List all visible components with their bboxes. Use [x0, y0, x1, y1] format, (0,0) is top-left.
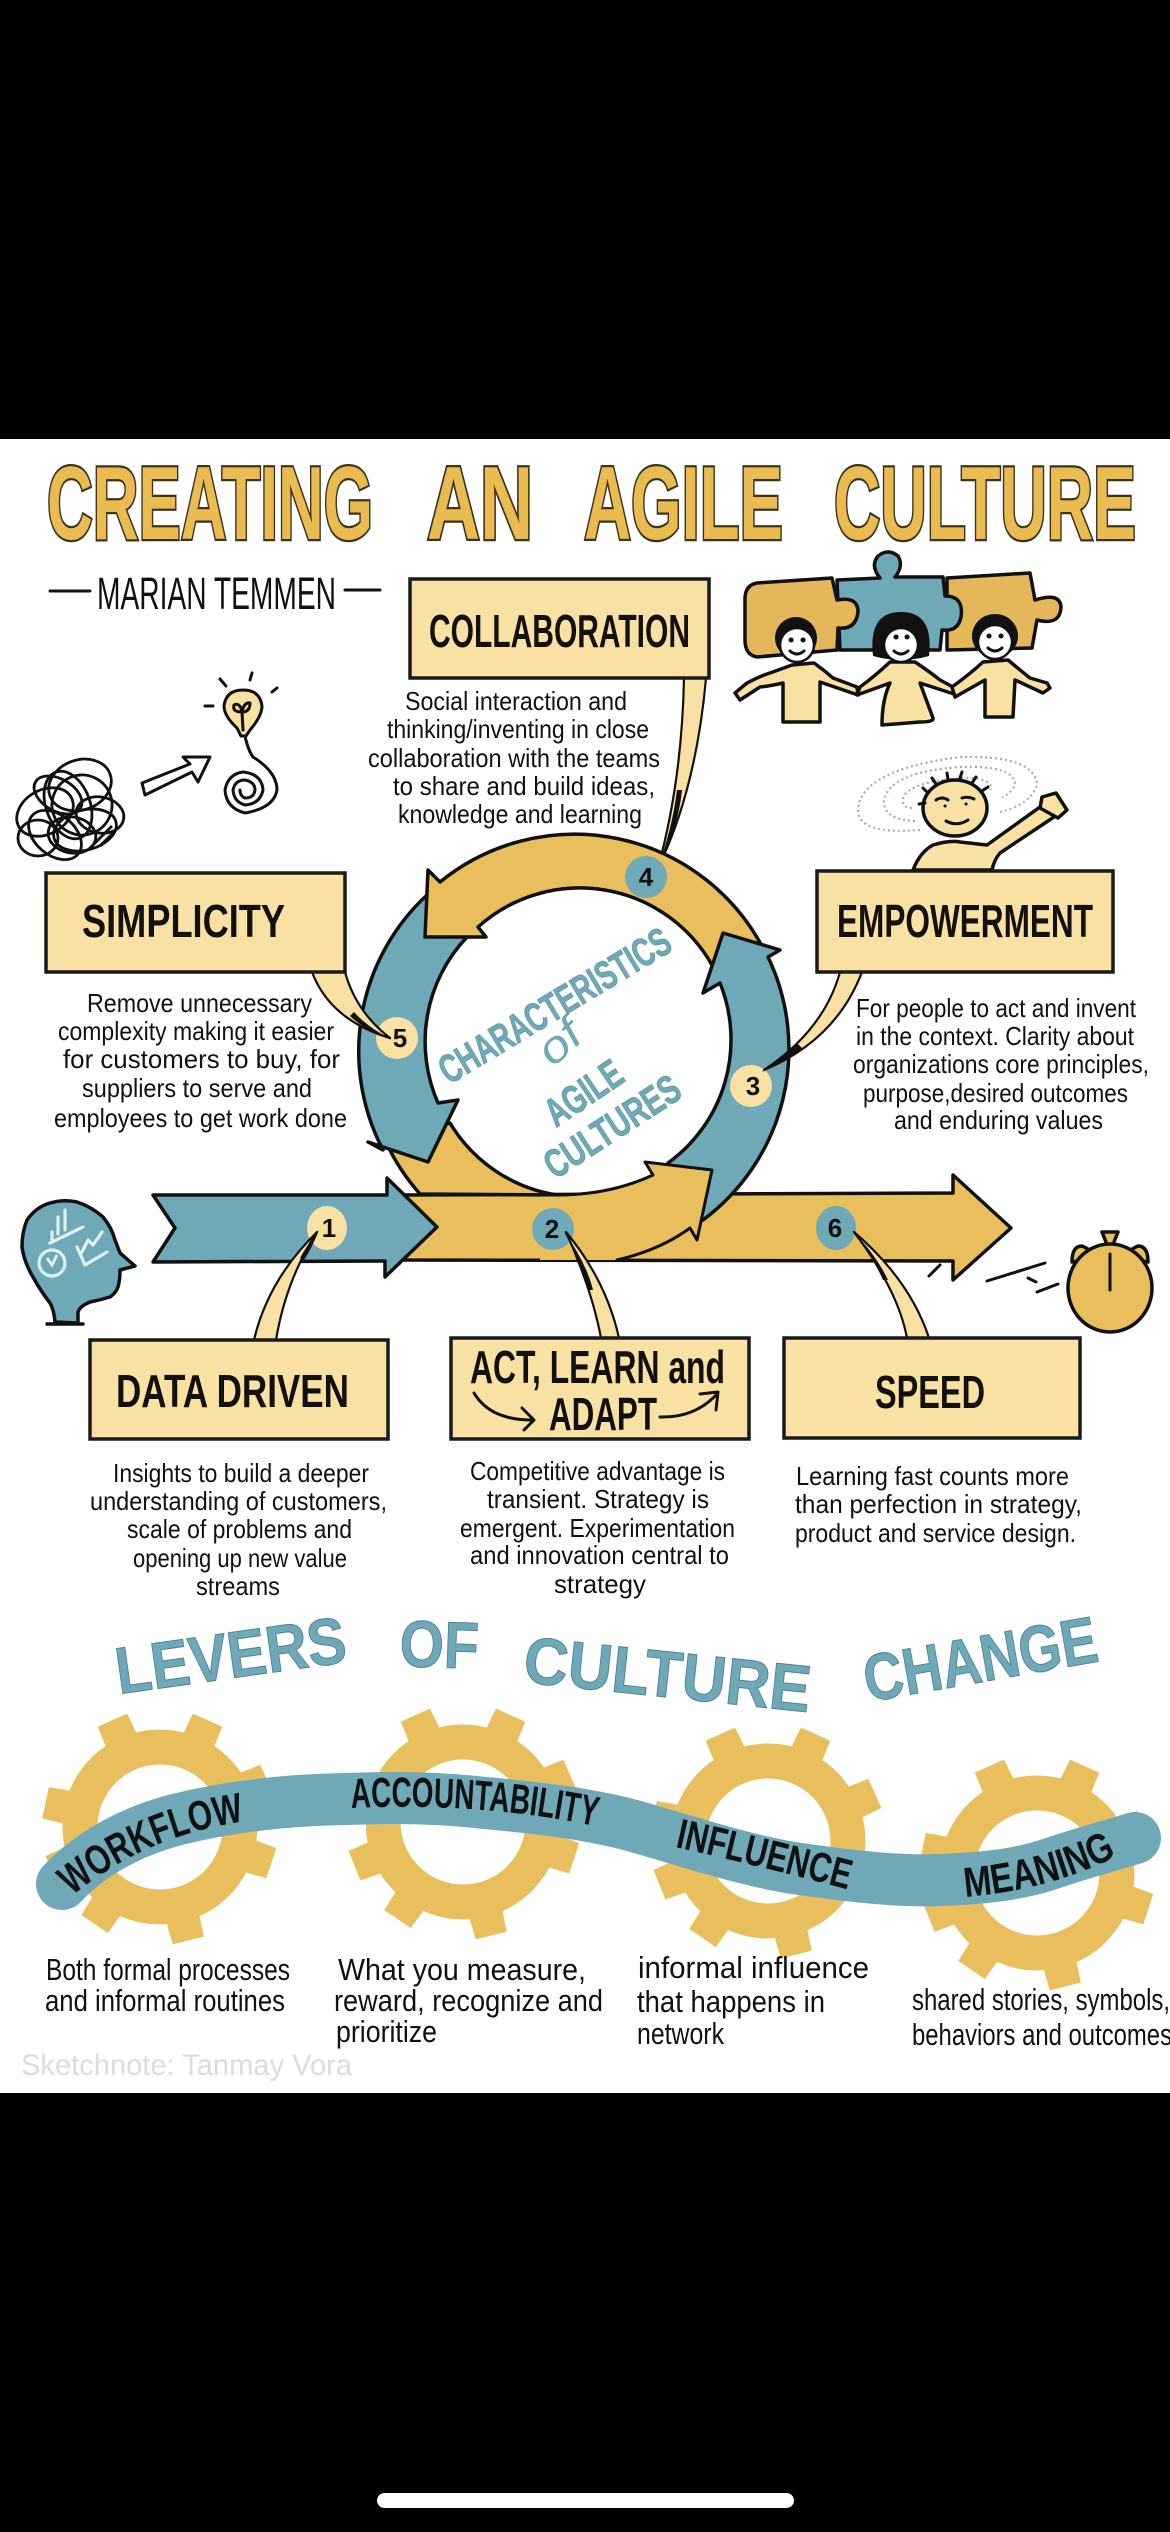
badge 5	[376, 1017, 418, 1059]
text: act learn adapt description: Competitive advantage is	[470, 1456, 725, 1486]
pointer to badge 5	[312, 972, 390, 1038]
pointer dark tip	[657, 790, 682, 870]
text: data driven description: understanding of customers,	[90, 1486, 387, 1516]
faces	[780, 625, 1012, 662]
text: data driven description: Insights to build a deeper	[113, 1458, 369, 1488]
badge 1: 1	[322, 1213, 336, 1243]
main process arrow gold (step 2 to 6)	[403, 1175, 1011, 1280]
title: AN	[427, 446, 533, 562]
text: accountability description: reward, recognize and	[334, 1983, 603, 2018]
text: collaboration description: collaboration with the teams	[368, 743, 660, 773]
badge 4	[625, 856, 667, 898]
text: collaboration description	[368, 686, 660, 829]
heading: levers of culture change: CULTURE	[521, 1622, 815, 1726]
text: influence description	[637, 1950, 869, 2051]
dial	[1068, 1244, 1152, 1332]
text: data driven description: streams	[196, 1571, 280, 1601]
text: data driven description: scale of problems and	[127, 1514, 352, 1544]
text: empowerment description: For people to act and invent	[856, 993, 1137, 1023]
ring title: characteristics of agile cultures: AGILE	[536, 1051, 632, 1135]
text: simplicity description: employees to get work done	[54, 1103, 347, 1133]
badge 2: 2	[545, 1214, 559, 1244]
gears	[42, 1708, 1154, 1991]
callout: collaboration	[410, 579, 709, 870]
text: data driven description: opening up new value	[133, 1543, 347, 1573]
box	[784, 1338, 1080, 1438]
dotted aura	[858, 757, 1037, 831]
watch ears	[1072, 1246, 1148, 1262]
pointer dark tip	[564, 1232, 593, 1290]
gold curved arrow outline	[540, 1162, 712, 1260]
head	[923, 780, 987, 836]
hand	[1108, 1254, 1112, 1290]
teal arrow segment left	[359, 895, 467, 1162]
badge 6: 6	[828, 1213, 842, 1243]
callout: act, learn and adapt: ADAPT	[549, 1388, 657, 1440]
box	[817, 871, 1113, 972]
callout: speed	[784, 1230, 1080, 1438]
text: collaboration description: Social interaction and	[405, 686, 627, 716]
callout: empowerment	[762, 871, 1113, 1072]
text: simplicity description: complexity making it easier	[58, 1016, 334, 1046]
text: speed description: Learning fast counts more	[796, 1461, 1069, 1491]
ring title: characteristics of agile cultures: of	[527, 1006, 597, 1075]
callout: act, learn and adapt	[451, 1232, 749, 1440]
callout: collaboration: COLLABORATION	[429, 605, 690, 657]
text: act learn adapt description: and innovation central to	[470, 1540, 729, 1570]
numbered badges	[307, 856, 856, 1250]
ribbon banner	[62, 1798, 1135, 1884]
pointer to badge 2	[566, 1232, 619, 1338]
text: workflow description	[45, 1952, 290, 2018]
badge 1	[307, 1206, 347, 1250]
callout: speed: SPEED	[875, 1366, 985, 1418]
icon: stopwatch	[929, 1232, 1152, 1332]
ring title: characteristics of agile cultures: CULTURES	[536, 1067, 689, 1188]
pointer to badge 6	[854, 1232, 929, 1338]
callout: simplicity	[46, 873, 392, 1040]
arrow	[142, 757, 210, 795]
speed lines	[929, 1263, 1058, 1292]
badge 3: 3	[746, 1071, 760, 1101]
icon: empowered person	[858, 757, 1067, 870]
text: influence description: network	[637, 2016, 724, 2051]
phone home indicator	[377, 2493, 794, 2508]
text: collaboration description: thinking/inventing in close	[387, 714, 649, 744]
people holding hands	[735, 660, 1050, 725]
text: speed description: than perfection in strategy,	[795, 1489, 1082, 1519]
ring title: characteristics of agile cultures: CHARACTERISTICS	[431, 920, 679, 1093]
text: workflow description: Both formal processes	[46, 1952, 290, 1987]
pointer dark tip	[350, 1012, 392, 1040]
text: simplicity description: Remove unnecessary	[87, 988, 312, 1018]
smiles	[790, 648, 1002, 654]
text: accountability description	[334, 1952, 603, 2049]
ribbon labels: INFLUENCE	[676, 1819, 854, 1890]
ribbon labels	[54, 1777, 1113, 1897]
head silhouette	[22, 1201, 135, 1324]
pointer to badge 4	[658, 678, 706, 868]
badge 3	[730, 1065, 772, 1107]
heading: levers of culture change: OF	[399, 1606, 480, 1683]
badge 6	[816, 1206, 856, 1250]
callout: act, learn and adapt: ACT, LEARN and	[470, 1341, 725, 1393]
pointer to badge 1	[254, 1232, 317, 1340]
lower left gold arc	[385, 1123, 557, 1195]
gear 3	[650, 1727, 885, 1959]
text: act learn adapt description: emergent. Experimentation	[460, 1513, 735, 1543]
lightbulb	[224, 690, 262, 736]
badge 4: 4	[639, 862, 654, 892]
main process arrow teal (step 1)	[153, 1178, 437, 1277]
gold curved arrow segment bottom	[540, 1162, 712, 1260]
title	[47, 446, 1136, 562]
fist	[1040, 793, 1067, 818]
text: simplicity description: for customers to buy, for	[63, 1044, 340, 1074]
ring of agile characteristics	[359, 834, 789, 1260]
ring title: characteristics of agile cultures	[431, 920, 689, 1188]
text: empowerment description: and enduring values	[894, 1105, 1103, 1135]
text: collaboration description: knowledge and learning	[398, 799, 642, 829]
callout: data driven	[90, 1230, 388, 1439]
infographic white page	[0, 439, 1170, 2093]
text: empowerment description: in the context. Clarity about	[856, 1021, 1135, 1051]
ribbon labels: WORKFLOW	[54, 1792, 239, 1892]
pointer dark tip	[300, 1230, 319, 1260]
text: simplicity description	[54, 988, 347, 1133]
box	[410, 579, 709, 678]
gear 4	[919, 1759, 1154, 1991]
text: accountability description: prioritize	[336, 2014, 437, 2049]
text: speed description	[795, 1461, 1082, 1548]
teal arrow segment right	[668, 933, 789, 1220]
callout: data driven: DATA DRIVEN	[116, 1365, 349, 1417]
heading: levers of culture change: LEVERS	[111, 1602, 351, 1708]
crown	[1102, 1232, 1118, 1250]
text: influence description: informal influence	[638, 1950, 869, 1985]
text: influence description: that happens in	[637, 1984, 825, 2019]
text: meaning description	[912, 1982, 1170, 2052]
title: CREATING	[47, 446, 373, 562]
icon: puzzle team	[735, 552, 1061, 725]
light rays	[205, 673, 277, 706]
text: empowerment description: purpose,desired outcomes	[863, 1078, 1128, 1108]
curved arrows	[474, 1392, 718, 1430]
text: act learn adapt description	[460, 1456, 735, 1599]
heading: levers of culture change: CHANGE	[858, 1602, 1103, 1716]
text: speed description: product and service design.	[795, 1518, 1076, 1548]
pointer to badge 3	[764, 972, 862, 1070]
box	[90, 1340, 388, 1439]
badge 2	[532, 1208, 574, 1250]
title: AGILE	[584, 446, 783, 562]
gear 2	[345, 1708, 580, 1940]
body and raised arm	[913, 807, 1057, 870]
puzzle pieces	[745, 552, 1061, 657]
gold arrow segment top	[425, 834, 764, 965]
chart and clock marks	[50, 1210, 107, 1265]
ribbon labels: MEANING	[964, 1834, 1113, 1897]
text: act learn adapt description: transient. Strategy is	[487, 1484, 709, 1514]
eyes	[791, 636, 1001, 640]
heading: levers of culture change	[111, 1602, 1103, 1726]
pointer dark tip	[762, 1044, 802, 1072]
box	[46, 873, 345, 972]
text: simplicity description: suppliers to serve and	[82, 1073, 312, 1103]
filament spiral	[225, 736, 277, 813]
text: data driven description	[90, 1458, 387, 1601]
text: accountability description: What you measure,	[338, 1952, 586, 1987]
callout: simplicity: SIMPLICITY	[82, 895, 285, 947]
text: act learn adapt description: strategy	[554, 1569, 646, 1599]
scribble	[8, 751, 127, 870]
hair	[775, 612, 1018, 660]
author credit: MARIAN TEMMEN	[97, 568, 336, 619]
sketchnote credit: Sketchnote: Tanmay Vora	[21, 2049, 352, 2082]
text: empowerment description	[853, 993, 1149, 1135]
box	[451, 1338, 749, 1439]
badge 5: 5	[393, 1023, 407, 1053]
face	[919, 772, 988, 824]
icon: tangled scribble to lightbulb	[8, 673, 277, 870]
ribbon labels: ACCOUNTABILITY	[352, 1777, 601, 1825]
text: collaboration description: to share and build ideas,	[393, 771, 655, 801]
icon: data head	[22, 1201, 135, 1324]
text: workflow description: and informal routines	[45, 1983, 285, 2018]
gear 1	[42, 1713, 277, 1945]
pointer dark tip	[852, 1230, 888, 1280]
